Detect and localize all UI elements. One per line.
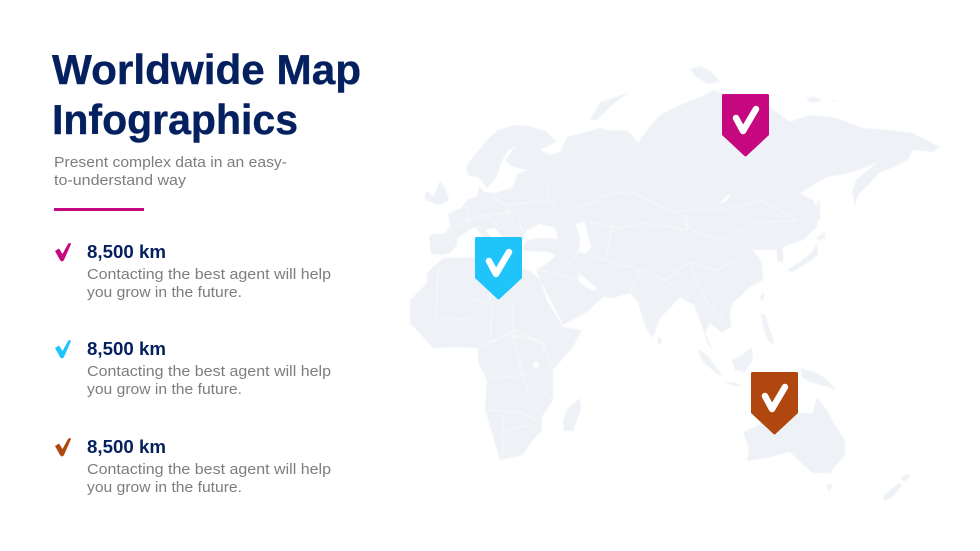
distance value: 8,500 km [87, 437, 166, 457]
description [87, 363, 331, 398]
title [52, 46, 361, 143]
world map [410, 66, 940, 501]
description: Contacting the best agent will help [87, 363, 331, 380]
title: Infographics [52, 96, 298, 143]
description: you grow in the future. [87, 479, 242, 496]
description [87, 266, 331, 301]
list item: pink [55, 242, 331, 301]
accent divider [54, 208, 144, 211]
map pin: blue, North Africa [475, 237, 522, 300]
subtitle: Present complex data in an easy- [54, 154, 287, 171]
icon: pink check [55, 243, 71, 262]
description: you grow in the future. [87, 381, 242, 398]
icon: brown check [55, 438, 71, 456]
description: Contacting the best agent will help [87, 461, 331, 478]
list item: blue [55, 339, 331, 398]
distance value: 8,500 km [87, 339, 166, 359]
description [87, 461, 331, 496]
map pin: pink, Russia [722, 94, 769, 156]
list item: brown [55, 437, 331, 496]
distance value: 8,500 km [87, 242, 166, 262]
subtitle [54, 154, 287, 189]
description: you grow in the future. [87, 284, 242, 301]
icon: blue check [55, 340, 71, 358]
description: Contacting the best agent will help [87, 266, 331, 283]
map pin: brown, Australia [751, 372, 798, 434]
title: Worldwide Map [52, 46, 361, 93]
subtitle: to-understand way [54, 172, 187, 189]
